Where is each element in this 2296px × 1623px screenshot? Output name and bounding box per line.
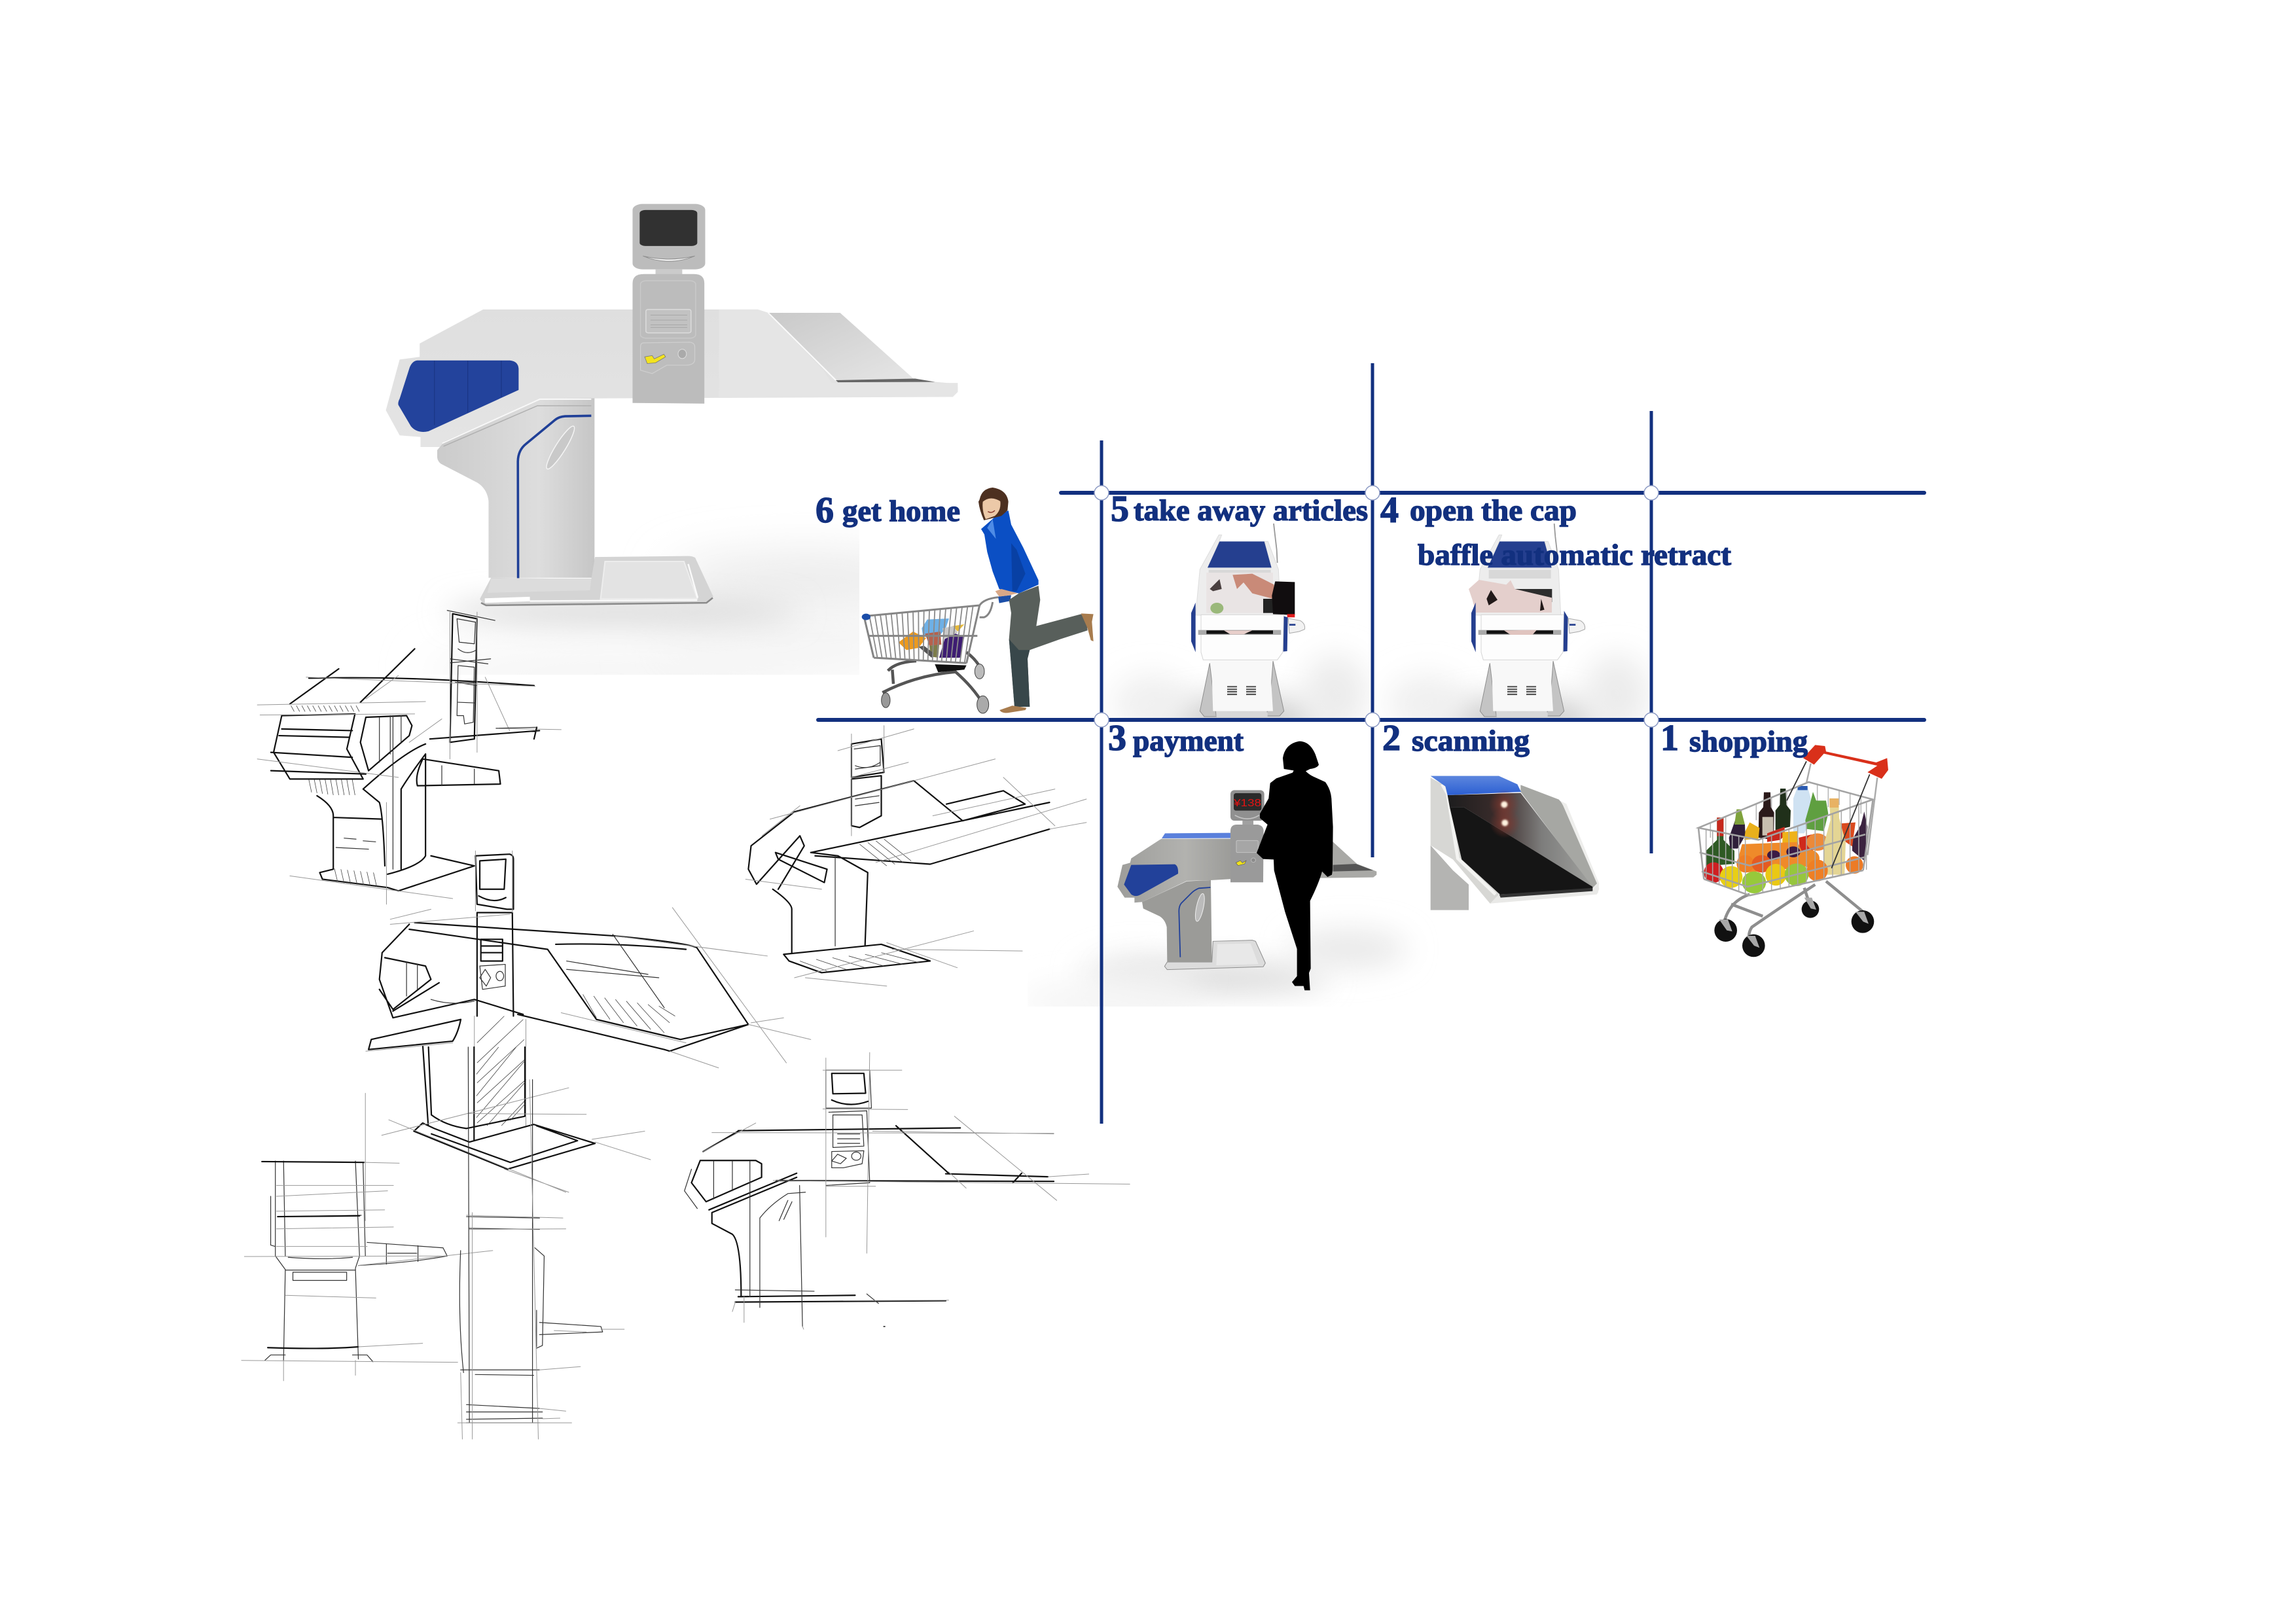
silhouette of customer — [1257, 741, 1333, 990]
basket wires — [1698, 761, 1877, 895]
blue cap — [1431, 776, 1521, 795]
column — [1200, 661, 1284, 717]
right table end — [1320, 840, 1376, 878]
slot — [1479, 630, 1561, 635]
label: step 1: shopping — [1689, 724, 1808, 758]
step 3 backdrop — [1077, 925, 1401, 1007]
sketch: front view bottom left — [242, 1093, 493, 1381]
step 4 backdrop — [1394, 656, 1649, 718]
tray lip — [1490, 883, 1599, 904]
sketch: side view bottom right — [685, 1052, 1130, 1329]
step 6 illustration: woman pushing cart — [862, 488, 1094, 713]
step 5 backdrop — [1119, 656, 1368, 718]
base — [1164, 940, 1265, 970]
label: step 4: 4 — [1380, 490, 1399, 531]
label: step 4: open the cap — [1410, 493, 1577, 527]
control tower — [632, 274, 704, 404]
label: step 1 — [1660, 718, 1808, 758]
receipt slot — [646, 310, 691, 333]
table body — [1117, 839, 1230, 902]
column — [1142, 880, 1212, 962]
label: step 1: 1 — [1660, 718, 1679, 758]
hook — [1554, 524, 1558, 563]
label: step 2 — [1382, 718, 1530, 758]
monitor — [632, 204, 705, 270]
label: step 3: payment — [1133, 724, 1244, 757]
sloped conveyor surface — [768, 313, 915, 380]
cart basket — [862, 595, 1011, 663]
label: step 3: 3 — [1108, 718, 1126, 758]
back wires — [1710, 785, 1861, 838]
conveyor belt — [1450, 807, 1592, 895]
hook — [1274, 524, 1278, 563]
scan window glass — [1448, 793, 1592, 887]
bottles and vegetables — [1706, 786, 1867, 875]
control tower — [1230, 825, 1264, 882]
table top — [386, 310, 958, 447]
column blue trim line — [518, 416, 591, 579]
price on monitor: ¥138 — [1233, 798, 1261, 809]
step 4 illustration: cap open — [1469, 524, 1585, 717]
outer right casing — [1560, 800, 1599, 893]
vents — [1227, 687, 1256, 694]
blue lid — [1162, 833, 1230, 838]
trousers — [1009, 586, 1088, 707]
sketch: three-quarter view top left — [257, 611, 561, 904]
hair and face — [978, 488, 1009, 520]
cart frame — [1725, 882, 1863, 940]
machine body — [1481, 615, 1564, 660]
jacket — [981, 510, 1039, 594]
blue lid — [1488, 541, 1552, 567]
sketch: side elevation bottom centre — [457, 1047, 624, 1439]
side handle — [1568, 618, 1585, 633]
label: step 6: 6 — [816, 490, 834, 531]
step 5 illustration: checkout front view — [1191, 524, 1305, 717]
process grid lines — [818, 363, 1924, 1124]
hand — [996, 589, 1018, 597]
base plate — [480, 556, 713, 605]
vents — [1507, 687, 1536, 694]
fruit — [1704, 846, 1828, 893]
cart contents — [899, 618, 964, 658]
label: step 2: 2 — [1382, 718, 1401, 758]
label: step 5: take away articles — [1134, 493, 1368, 527]
step 3 illustration: payment at kiosk — [1117, 790, 1376, 970]
trim line — [1179, 887, 1210, 957]
label: step 3 — [1108, 718, 1244, 758]
scanner lights — [1489, 789, 1520, 838]
lower pillar — [1431, 846, 1469, 910]
blue lid — [1208, 541, 1272, 567]
step 2 illustration: scanner close-up — [1431, 776, 1599, 910]
card reader — [641, 342, 695, 374]
label: step 6: get home — [842, 494, 960, 527]
step 1 illustration: full shopping cart — [1698, 745, 1888, 957]
label: step 6 — [816, 490, 960, 531]
red handle — [1803, 745, 1888, 779]
slot — [1198, 630, 1281, 635]
label: step 4: baffle automatic retract — [1418, 538, 1732, 571]
bag and hand — [1206, 573, 1295, 617]
column — [1480, 661, 1564, 717]
panel: main product render — [275, 204, 958, 700]
blue bumper — [1124, 865, 1178, 896]
sketch: large perspective view centre — [366, 851, 811, 1192]
floor shadow — [454, 548, 859, 675]
blue bumper panel — [398, 361, 518, 432]
cart frame — [882, 652, 989, 713]
monitor — [1230, 790, 1265, 821]
handle — [1194, 893, 1206, 922]
label: step 2: scanning — [1412, 724, 1530, 757]
sketch: perspective view right of top left — [745, 726, 1086, 986]
wheels — [1714, 898, 1874, 957]
label: step 5: 5 — [1111, 489, 1129, 529]
label: step 4 — [1380, 490, 1732, 571]
machine body — [1201, 615, 1284, 660]
left casing — [1431, 777, 1499, 904]
shoes — [999, 613, 1094, 713]
pink bag — [1469, 580, 1552, 613]
side handle — [543, 423, 578, 471]
column — [437, 398, 594, 578]
grid node markers — [1094, 486, 1659, 727]
monitor screen — [639, 210, 697, 246]
side handle — [1288, 618, 1305, 633]
